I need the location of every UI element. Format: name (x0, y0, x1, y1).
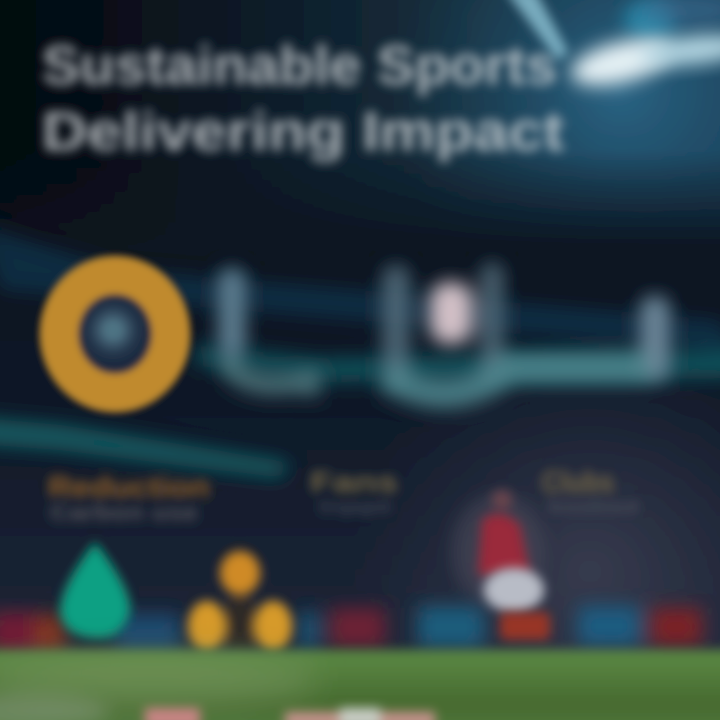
stat label: left (48, 471, 210, 525)
stat label: right (542, 466, 638, 516)
icon: community of three (188, 551, 292, 651)
stat label: right: Clubs (542, 466, 614, 499)
icon: green leaf (60, 542, 130, 638)
player in red (452, 490, 550, 640)
grass pitch (0, 650, 720, 720)
stat label: middle: Fans (310, 466, 398, 499)
stat label: right: Involved (548, 499, 638, 516)
teal and blue light bands (0, 225, 720, 478)
advertising boards (0, 606, 702, 654)
stat label: left: Carbon use (50, 500, 198, 525)
stat label: left: Reduction (48, 471, 210, 504)
line chart: glowing pillars (218, 262, 670, 395)
donut chart: % (105, 321, 121, 341)
title: Delivering Impact (42, 100, 564, 162)
floodlight (505, 0, 720, 94)
stat label: middle (310, 466, 398, 516)
title (42, 34, 564, 162)
stat label: middle: Engaged (320, 499, 390, 516)
title: Sustainable Sports (42, 34, 557, 96)
donut chart (59, 275, 171, 393)
